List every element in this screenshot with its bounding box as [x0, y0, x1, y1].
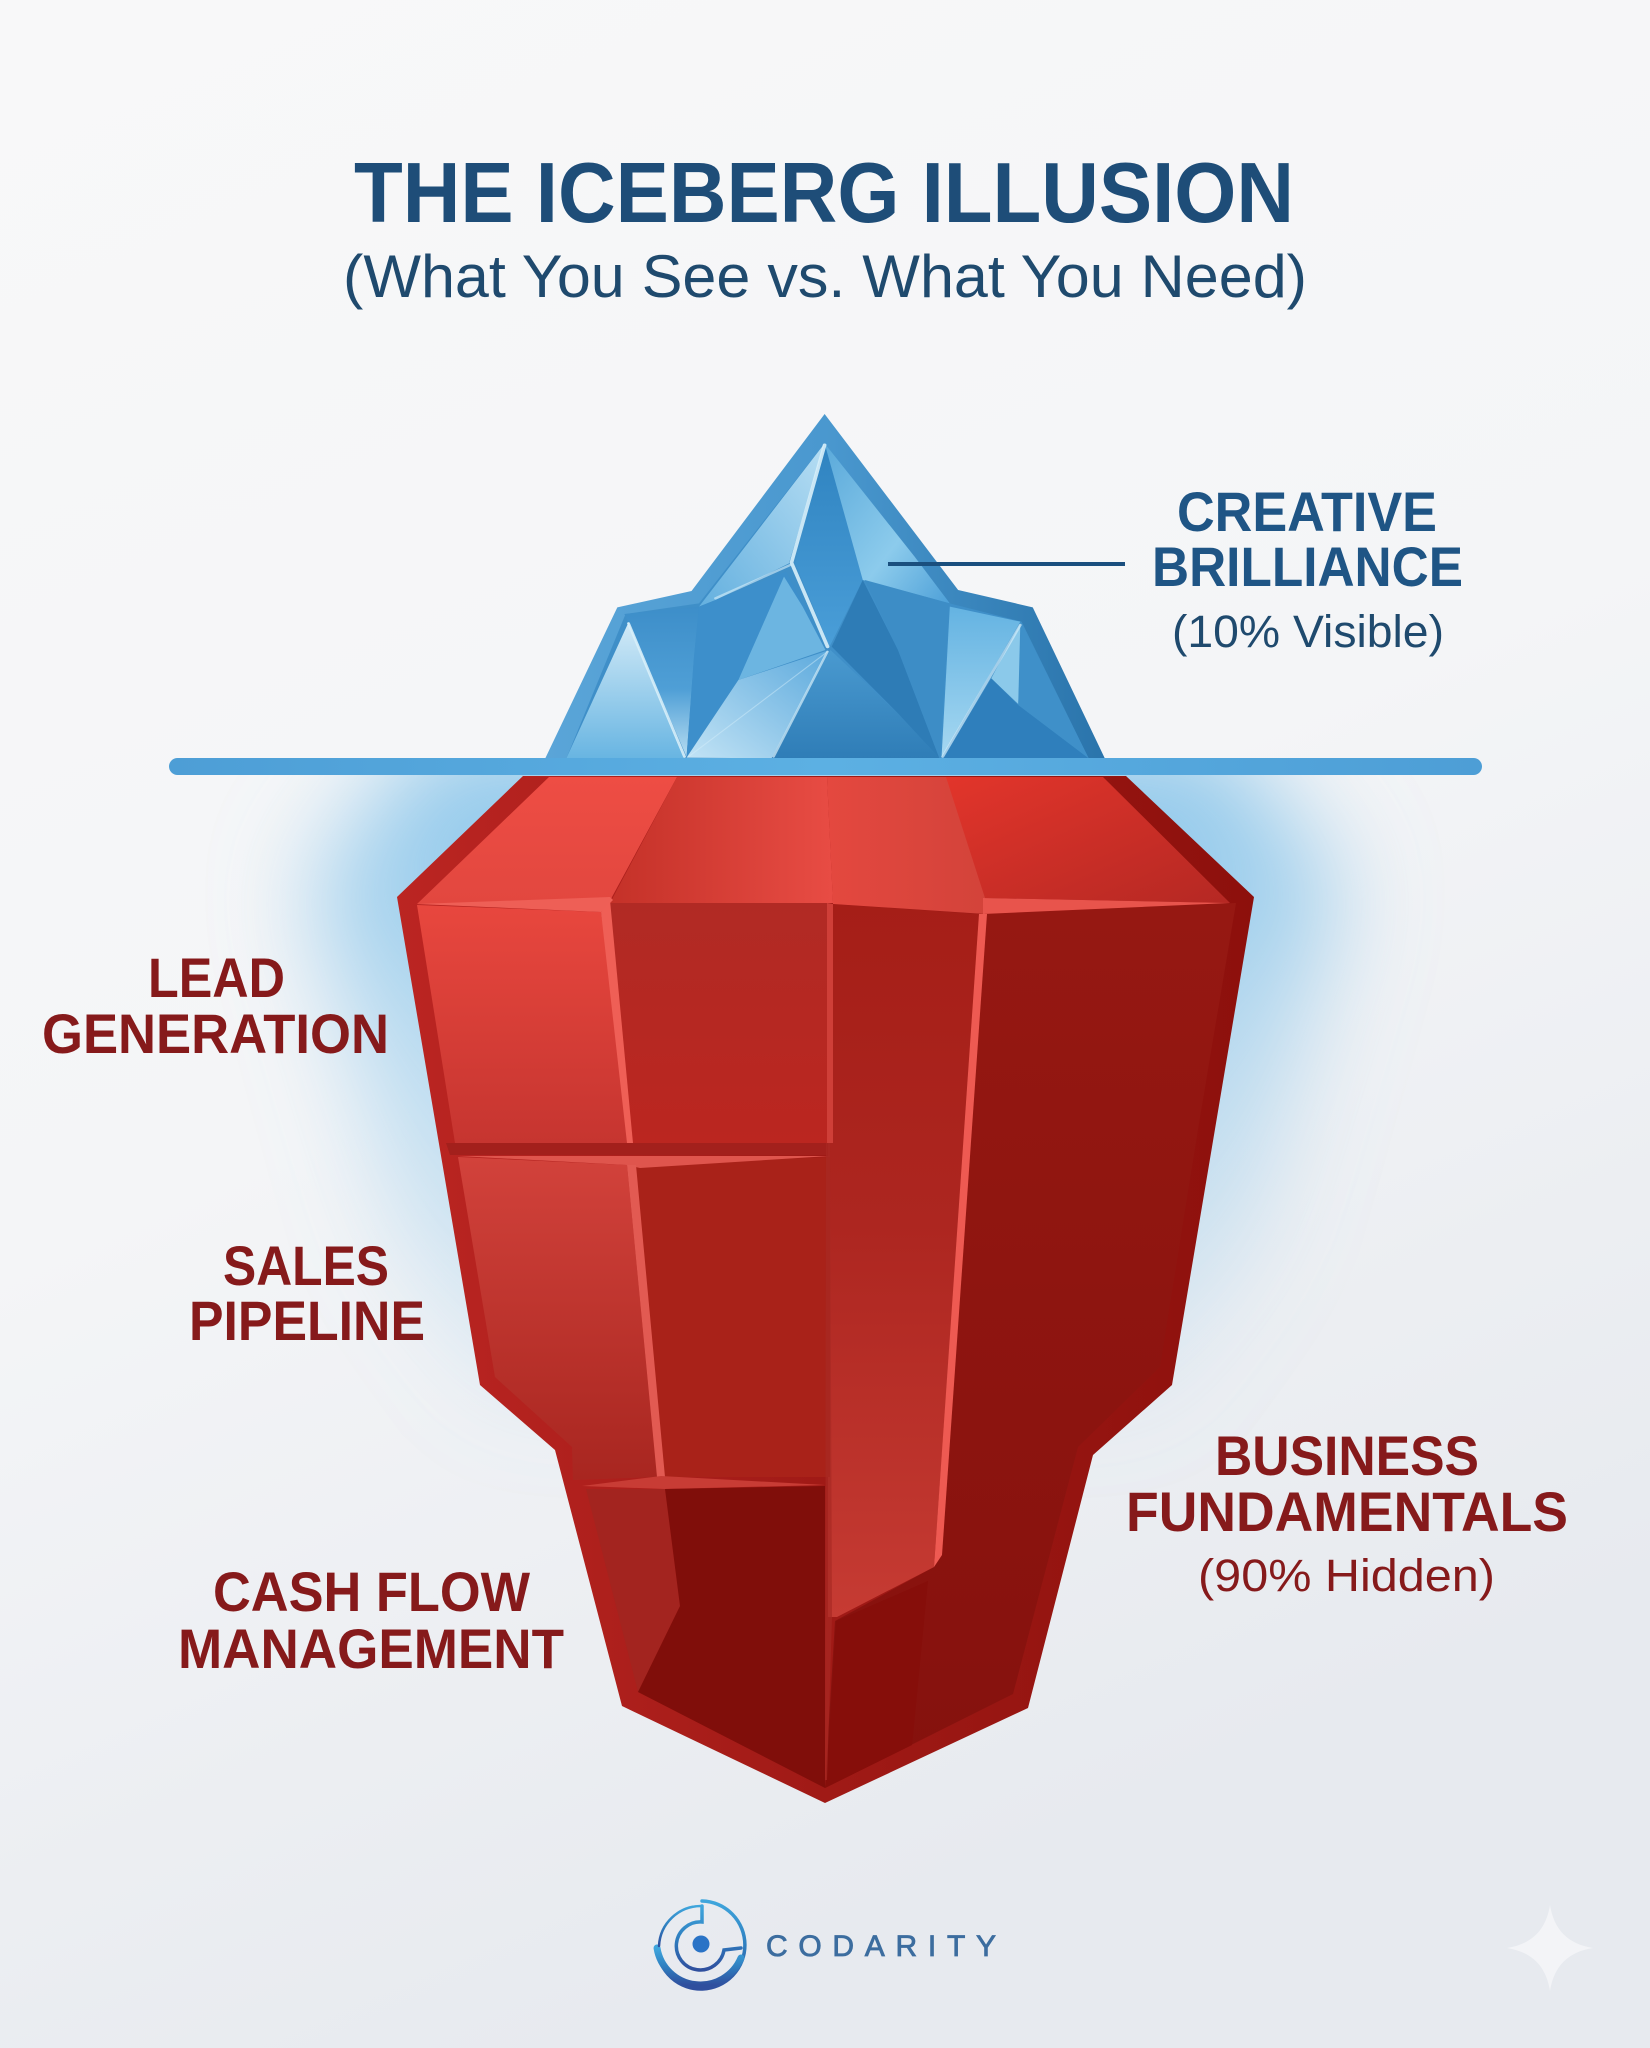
- label: sales pipeline: [189, 1234, 425, 1352]
- label: cash flow management: MANAGEMENT: [178, 1617, 564, 1680]
- label: business fundamentals, 90% hidden: [1126, 1424, 1568, 1601]
- leader line to Creative Brilliance: [888, 562, 1125, 566]
- waterline: [169, 758, 1482, 775]
- subtitle: (What You See vs. What You Need): [343, 243, 1307, 310]
- label: sales pipeline: PIPELINE: [189, 1289, 425, 1352]
- label: cash flow management: [178, 1560, 564, 1680]
- label: creative brilliance, 10% visible: [1152, 480, 1463, 657]
- label: lead generation: LEAD: [148, 946, 285, 1009]
- title: THE ICEBERG ILLUSION: [354, 146, 1294, 241]
- brand name: CODARITY: [766, 1930, 996, 1963]
- underwater glow: [310, 740, 1340, 1400]
- logo mark: [657, 1901, 745, 1989]
- label: sales pipeline: SALES: [223, 1234, 389, 1297]
- label: lead generation: [42, 946, 389, 1065]
- label: lead generation: GENERATION: [42, 1002, 389, 1065]
- label: creative brilliance, 10% visible: BRILLIANCE: [1152, 535, 1463, 598]
- icon: sparkle watermark: [1507, 1905, 1593, 1991]
- label: business fundamentals, 90% hidden: FUNDAMENTALS: [1126, 1480, 1568, 1543]
- label: business fundamentals, 90% hidden: BUSINESS: [1215, 1424, 1479, 1487]
- label: creative brilliance, 10% visible: (10% Visible): [1172, 606, 1444, 657]
- label: business fundamentals, 90% hidden: (90% Hidden): [1198, 1550, 1495, 1601]
- label: cash flow management: CASH FLOW: [213, 1560, 530, 1623]
- iceberg tip: visible part: [545, 414, 1105, 759]
- label: creative brilliance, 10% visible: CREATIVE: [1177, 480, 1437, 543]
- iceberg base: hidden part: [397, 776, 1254, 1803]
